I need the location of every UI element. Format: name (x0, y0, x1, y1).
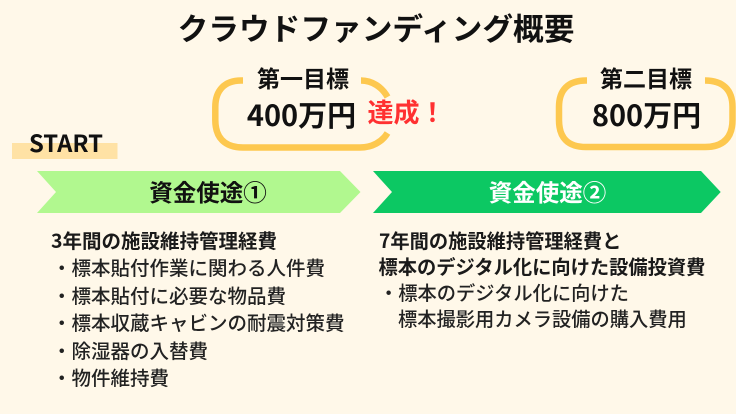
second goal label: 第二目標 (600, 60, 692, 94)
list 2 (379, 278, 687, 332)
achieved label: 達成！ (367, 93, 446, 130)
list 1 (52, 252, 345, 391)
list 2: ・標本のデジタル化に向けた (379, 278, 629, 306)
heading 2 (378, 226, 705, 280)
second goal amount: 800万円 (592, 93, 701, 135)
list 1: ・標本貼付に必要な物品費 (52, 280, 286, 309)
start label: START (29, 124, 103, 159)
title: クラウドファンディング概要 (178, 4, 574, 49)
list 1: ・物件維持費 (52, 362, 169, 391)
arrow label 1: 資金使途① (149, 174, 267, 208)
first goal label: 第一目標 (257, 60, 349, 94)
list 2: 標本撮影用カメラ設備の購入費用 (398, 304, 687, 332)
arrow shape 2 (373, 171, 721, 213)
arrow label 2: 資金使途② (489, 174, 606, 208)
first goal amount: 400万円 (247, 93, 356, 135)
arrow shape 1 (37, 171, 360, 213)
panel: first goal (215, 60, 388, 148)
list 1: ・除湿器の入替費 (52, 335, 208, 364)
list 1: ・標本収蔵キャビンの耐震対策費 (52, 307, 345, 336)
start marker (12, 124, 118, 159)
start highlight band (12, 143, 118, 159)
first goal rounded outline (215, 80, 388, 148)
heading 2: 7年間の施設維持管理経費と (379, 226, 621, 254)
heading 1: 3年間の施設維持管理経費 (51, 225, 277, 254)
arrow: funding use 2 (373, 171, 721, 213)
second goal rounded outline (559, 80, 732, 147)
list 1: ・標本貼付作業に関わる人件費 (52, 252, 325, 281)
panel: second goal (559, 60, 732, 147)
arrow: funding use 1 (37, 171, 360, 213)
heading 2: 標本のデジタル化に向けた設備投資費 (378, 252, 705, 280)
text block: funding use 1 details (51, 225, 345, 391)
text block: funding use 2 details (378, 226, 705, 332)
